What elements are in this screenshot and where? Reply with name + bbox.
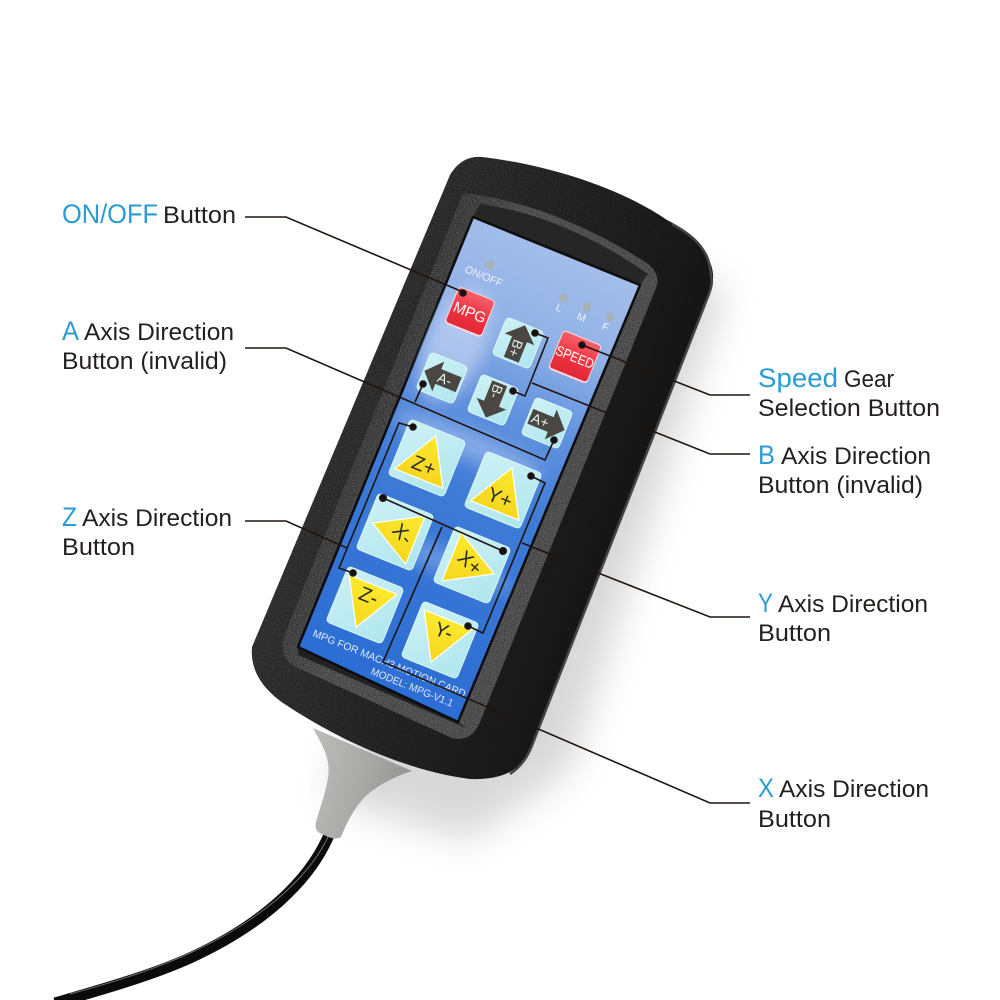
label: Speed: Selection Button	[758, 395, 940, 422]
label: ON/OFF: ON/OFF	[62, 199, 158, 229]
panel labels: F	[600, 321, 610, 334]
label: B axis: Axis Direction	[781, 443, 931, 470]
button: B-: B-	[486, 382, 506, 401]
label: ON/OFF	[62, 199, 236, 229]
label: ON/OFF: Button	[163, 202, 236, 229]
label: B axis	[758, 440, 931, 499]
button: SPEED: SPEED	[553, 342, 597, 372]
leader: B axis	[510, 330, 750, 454]
panel labels: MPG FOR MACH3 MOTION CARD	[311, 628, 468, 700]
button: A+: A+	[529, 410, 551, 431]
leader: ON/OFF	[245, 217, 466, 296]
leader: X axis	[380, 495, 750, 803]
button: B+: B+	[505, 337, 527, 359]
button: A+	[521, 397, 573, 449]
button: X+: X+	[453, 547, 486, 580]
status LEDs	[486, 260, 614, 322]
label: Speed: Gear	[844, 366, 894, 393]
button: B+	[492, 317, 544, 369]
bottom recess	[298, 647, 466, 728]
label: A axis: Button (invalid)	[62, 348, 227, 375]
panel labels: ON/OFF	[463, 264, 504, 290]
button: X+	[433, 526, 511, 604]
button: MPG: MPG	[451, 299, 489, 327]
button: SPEED	[548, 330, 602, 384]
panel labels: L	[554, 302, 564, 315]
button: Y-	[401, 601, 479, 679]
leader: Z axis	[245, 423, 416, 576]
button: Z-: Z-	[355, 583, 381, 610]
bezel texture	[283, 193, 657, 739]
label: Y axis: Y	[758, 588, 773, 618]
button: X-	[356, 493, 434, 571]
side rim highlight	[510, 224, 712, 774]
button: B-	[467, 374, 519, 426]
bezel ring	[283, 193, 657, 739]
top recess	[473, 204, 648, 285]
label: Speed	[758, 363, 940, 422]
label: Speed: Speed	[758, 363, 838, 393]
label: Z axis	[62, 502, 232, 561]
button: Y+	[464, 451, 542, 529]
label: Z axis: Z	[62, 502, 77, 532]
button: MPG	[444, 286, 496, 338]
label: X axis: Axis Direction	[779, 776, 929, 803]
leader: A axis	[245, 348, 557, 460]
blue panel	[298, 217, 640, 722]
button: Z+	[388, 419, 466, 497]
shell texture	[252, 157, 713, 779]
controller body	[252, 157, 713, 779]
label: Y axis	[758, 588, 928, 647]
button: Y+: Y+	[484, 483, 515, 513]
button: Y-: Y-	[431, 618, 456, 645]
label: A axis: Axis Direction	[84, 319, 234, 346]
panel labels	[311, 264, 610, 710]
label: X axis: X	[758, 773, 774, 803]
button: X-: X-	[387, 520, 417, 549]
panel labels: MODEL: MPG-V1.1	[369, 666, 455, 710]
label: A axis	[62, 316, 234, 375]
outer shell	[252, 157, 713, 779]
leader: Y axis	[465, 473, 750, 633]
label: Y axis: Axis Direction	[778, 591, 928, 618]
label: X axis: Button	[758, 806, 831, 833]
button: A-	[416, 352, 468, 404]
button: Z-	[326, 566, 404, 644]
label: Z axis: Button	[62, 534, 135, 561]
button: A-: A-	[435, 369, 455, 389]
button: Z+: Z+	[408, 452, 439, 481]
label: B axis: B	[758, 440, 775, 470]
label: B axis: Button (invalid)	[758, 472, 923, 499]
label: Y axis: Button	[758, 620, 831, 647]
label: Z axis: Axis Direction	[82, 505, 232, 532]
drop shadow	[330, 190, 725, 840]
leader: Speed	[579, 342, 750, 395]
panel labels: M	[575, 311, 587, 325]
cable	[55, 830, 331, 1000]
label: X axis	[758, 773, 929, 833]
label: A axis: A	[62, 316, 79, 346]
strain relief	[313, 728, 412, 838]
